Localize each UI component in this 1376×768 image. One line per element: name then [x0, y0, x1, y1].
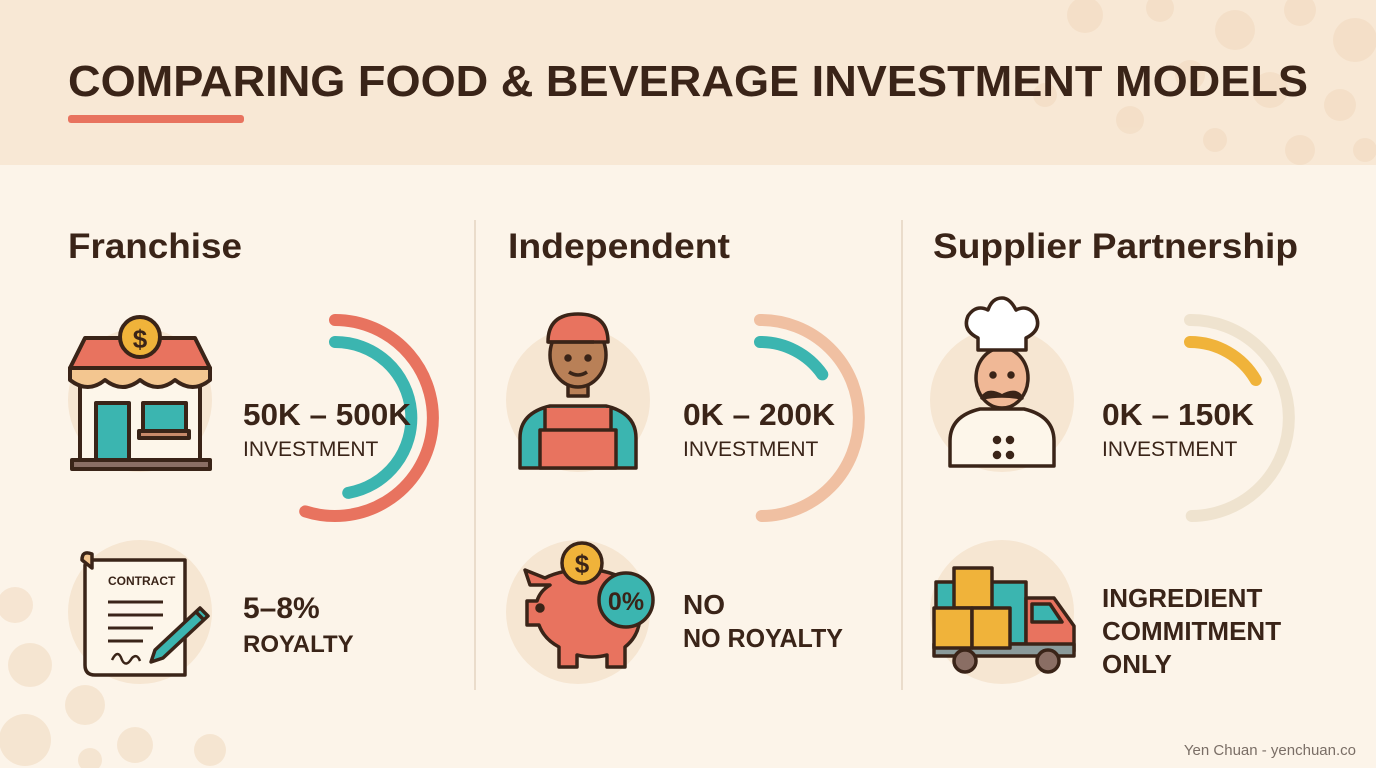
gauge: supplier — [1190, 320, 1289, 516]
heading: independent: Independent — [508, 227, 730, 266]
icon: delivery truck — [930, 540, 1074, 684]
icon: piggy bank: $ — [575, 549, 590, 579]
panel: independent: NO ROYALTY — [683, 623, 843, 653]
title underline — [68, 115, 244, 123]
panel: supplier partnership: ONLY — [1102, 649, 1172, 679]
icon: piggy bank: 0% — [608, 588, 644, 616]
text: royalty: NO — [683, 589, 725, 620]
panel: franchise — [68, 227, 433, 684]
panel: supplier partnership: INVESTMENT — [1102, 438, 1238, 461]
text: investment range: 50K – 500K — [243, 397, 412, 432]
panel: franchise: INVESTMENT — [243, 438, 379, 461]
header band — [0, 0, 1376, 165]
icon: contract — [68, 540, 212, 684]
icon: storefront: $ — [133, 324, 148, 354]
footer credit: Yen Chuan - yenchuan.co — [1184, 742, 1356, 759]
gauge: franchise — [305, 320, 433, 516]
panel: supplier partnership — [930, 227, 1298, 684]
icon: contract: CONTRACT — [108, 574, 176, 588]
title: COMPARING FOOD & BEVERAGE INVESTMENT MODELS — [68, 57, 1308, 106]
heading: franchise: Franchise — [68, 227, 242, 266]
text: investment range: 0K – 150K — [1102, 397, 1255, 432]
panel: franchise: ROYALTY — [243, 631, 354, 658]
gauge: independent — [760, 320, 859, 516]
icon: worker — [506, 314, 650, 472]
icon: piggy bank — [506, 540, 653, 684]
text: ingredient commitment: INGREDIENT — [1102, 583, 1262, 613]
heading: supplier partnership: Supplier Partnership — [933, 227, 1298, 266]
icon: chef — [930, 298, 1074, 472]
text: royalty: 5–8% — [243, 592, 320, 625]
icon: storefront — [68, 317, 212, 472]
panel: independent: INVESTMENT — [683, 438, 819, 461]
text: investment range: 0K – 200K — [683, 397, 836, 432]
panel: independent — [506, 227, 859, 684]
panel: supplier partnership: COMMITMENT — [1102, 616, 1281, 646]
